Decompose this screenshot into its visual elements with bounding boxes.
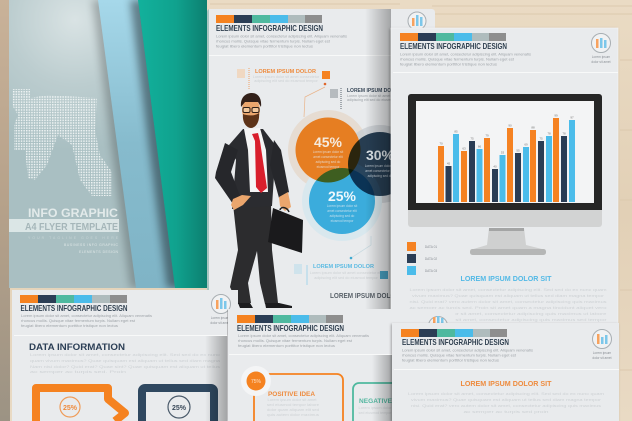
intro text: feugiat libero elementum porttitor tristique non lectus xyxy=(216,44,313,48)
venn circles: adipiscing sed do xyxy=(316,160,341,164)
color bar xyxy=(401,329,507,337)
icon: logo: Lorem ipsum xyxy=(211,316,230,320)
cover blue fold xyxy=(92,0,175,288)
chart paragraph: ac semper ac turpis sed. Proin sit amet quam a magna tincidunt aliquet vero xyxy=(410,306,606,310)
heading: ELEMENTS INFOGRAPHIC DESIGN xyxy=(400,42,507,51)
icon: logo: dolor sit amet xyxy=(592,356,612,360)
panel: lorem text flyer xyxy=(392,323,619,421)
bar value labels: 78 xyxy=(547,132,551,136)
positive idea box: POSITIVE IDEA xyxy=(268,391,315,398)
item: blue label: LOREM IPSUM DOLOR xyxy=(313,264,374,270)
venn circles: Lorem ipsum dolor sit xyxy=(313,150,343,154)
section paragraph xyxy=(30,353,221,374)
jacket torso xyxy=(229,129,276,209)
intro text: feugiat libero elementum porttitor tristique non lectus xyxy=(238,344,335,348)
chart paragraph xyxy=(410,288,608,322)
glasses xyxy=(243,108,259,112)
venn circles: adipiscing sed do xyxy=(368,174,393,178)
bar value labels xyxy=(439,114,574,168)
bar value labels: 53 xyxy=(501,150,504,154)
cover subtitle band xyxy=(9,219,119,233)
section title: DATA INFORMATION xyxy=(29,342,125,352)
color bar xyxy=(216,15,322,23)
monitor xyxy=(408,94,602,255)
color bar xyxy=(20,295,127,303)
bar value labels: 69 xyxy=(524,142,528,146)
legend: DATA 03 xyxy=(425,269,437,273)
intro text xyxy=(216,34,347,48)
item: orange label: Lorem ipsum dolor sit amet consectetur xyxy=(253,75,320,79)
section paragraph: vivum maximus? Quae quisquam est aliquam ut tellus sed diam magna tempor xyxy=(411,398,602,402)
item: orange label xyxy=(237,68,330,117)
chart paragraph: Lorem ipsum dolor sit amet, consectetur adipiscing elit. Sed sed do ex nunc quam xyxy=(410,288,606,292)
negative idea box: Lorem ipsum dolor xyxy=(358,406,392,410)
legend xyxy=(407,242,437,275)
icon: logo: Lorem ipsum xyxy=(593,351,612,355)
tie xyxy=(252,133,267,193)
intro text xyxy=(238,334,369,348)
item: blue label: adipiscing elit sed do eiusmod tempor xyxy=(314,276,378,280)
intro text xyxy=(21,314,152,328)
panel: flyer with monitor chart xyxy=(391,28,618,328)
item: gray label: LOREM IPSUM DOLOR xyxy=(347,88,402,94)
bar value labels: 75 xyxy=(470,136,474,140)
section paragraph xyxy=(408,392,604,414)
world map xyxy=(12,89,112,196)
intro text: feugiat libero elementum porttitor tristique non lectus xyxy=(400,62,497,66)
bar chart xyxy=(438,114,575,202)
hair xyxy=(241,93,261,107)
cover tagline: ELEMENTS DESIGN xyxy=(79,250,119,254)
heading: ELEMENTS INFOGRAPHIC DESIGN xyxy=(237,324,344,333)
item: blue label: Lorem ipsum dolor sit amet consectetur elit xyxy=(310,271,383,275)
beard xyxy=(243,113,259,128)
bar value labels: 99 xyxy=(554,114,558,118)
cover tagline xyxy=(28,236,119,254)
cover title: INFO GRAPHIC xyxy=(28,206,118,220)
positive idea box: 75% xyxy=(251,379,262,385)
cover tagline: BUSINESS INFO GRAPHIC xyxy=(64,243,119,247)
cover teal fold xyxy=(130,0,207,288)
circle value 45%: 45% xyxy=(314,134,343,150)
bar value labels: 45 xyxy=(447,162,450,166)
businessman xyxy=(215,93,303,308)
icon: logo: dolor sit amet xyxy=(591,60,611,64)
bar value labels: 85 xyxy=(454,130,458,134)
navy box: 25% xyxy=(172,405,187,412)
chart paragraph: vivum maximus? Quae quisquam est aliquam ut tellus sed diam magna tempor xyxy=(412,294,605,298)
circle value 30%: 30% xyxy=(366,147,395,163)
section paragraph: Nam nisi dolor? Quid erat? Quae sint? Quae quisquam est aliquam ut tellus xyxy=(30,365,220,369)
venn circles: eiusmod tempor xyxy=(331,219,354,223)
intro text: rhoncus mollis. Quisque vitae fermentum turpis. Nullam eget est xyxy=(402,354,516,358)
bar value labels: 75 xyxy=(539,136,543,140)
venn circles: Lorem ipsum dolor sit xyxy=(365,164,395,168)
panel: cover flyer xyxy=(9,0,207,288)
briefcase xyxy=(268,208,303,253)
stand xyxy=(470,228,546,255)
venn circles xyxy=(288,110,391,241)
shoes xyxy=(238,303,292,308)
intro text: rhoncus mollis. Quisque vitae fermentum turpis. Nullam eget est xyxy=(216,40,330,44)
section paragraph: Lorem ipsum dolor sit amet, consectetur adipiscing elit. Sed sed do ex nunc quam xyxy=(408,392,604,396)
section paragraph: Lorem ipsum dolor sit amet, consectetur adipiscing elit. Sed sed do ex nunc xyxy=(30,353,220,357)
chart paragraph: vero autem dolor sit amet, consectetur adipiscing quis maximus sed tempor xyxy=(410,318,608,322)
intro text xyxy=(402,348,533,362)
venn circles: adipiscing sed do xyxy=(330,214,355,218)
legs xyxy=(230,204,278,304)
positive idea box: quis autem dolor maximus xyxy=(267,413,319,417)
venn circles: amet consectetur elit xyxy=(365,169,395,173)
chart paragraph: Lorem ipsum dolor sit amet, consectetur adipiscing quis maximus ut labore xyxy=(410,312,606,316)
navy box xyxy=(142,388,214,421)
legend: DATA 01 xyxy=(425,245,437,249)
panel: positive idea flyer xyxy=(228,309,455,421)
negative idea box xyxy=(353,383,393,421)
section paragraph: quam vivum maximus? Quae quisquam est aliquam ut tellus sed diam magna xyxy=(30,359,221,363)
item: gray label: adipiscing elit sed do eiusmod tempor xyxy=(347,98,408,102)
intro text: rhoncus mollis. Quisque vitae fermentum turpis. Nullam eget est xyxy=(238,339,352,343)
face xyxy=(242,102,260,116)
intro text: Lorem ipsum dolor sit amet, consectetur adipiscing elit. Aliquam venenatis xyxy=(216,34,347,38)
item: gray label xyxy=(330,88,391,109)
shirt xyxy=(244,128,268,192)
left arm xyxy=(215,143,236,202)
intro text: Lorem ipsum dolor sit amet, consectetur adipiscing elit. Aliquam venenatis xyxy=(400,52,531,56)
intro text: feugiat libero elementum porttitor tristique non lectus xyxy=(21,324,118,328)
cover tagline: YOUR TAGLINE GOES HERE xyxy=(28,236,119,240)
positive idea box xyxy=(241,366,343,421)
bar value labels: 97 xyxy=(570,116,574,120)
negative idea box: sed eiusmod tempor xyxy=(358,411,392,415)
orange arrow box xyxy=(36,388,125,421)
intro text xyxy=(400,52,531,66)
legend: DATA 02 xyxy=(425,257,437,261)
venn circles: eiusmod tempor xyxy=(317,165,340,169)
chart paragraph: nisi. Quid erat? vero autem dolor sit amet, consectetur adipiscing quis maximus xyxy=(410,300,607,304)
bar value labels: 66 xyxy=(478,144,481,148)
bar value labels: 70 xyxy=(439,142,443,146)
section paragraph: nisi. Quid erat? vero autem dolor sit amet, consectetur adipiscing quis maximus xyxy=(411,404,601,408)
item: blue label xyxy=(294,236,388,285)
orange arrow box: 25% xyxy=(63,405,78,412)
color bar xyxy=(237,315,343,323)
icon: logo xyxy=(210,294,230,325)
right arm xyxy=(274,140,289,198)
bar value labels: 79 xyxy=(485,134,489,138)
cover gray layer xyxy=(9,0,175,288)
heading: ELEMENTS INFOGRAPHIC DESIGN xyxy=(402,338,509,347)
bar value labels: 78 xyxy=(562,132,566,136)
section paragraph: ac semper ac turpis sed proin xyxy=(464,410,548,414)
intro text: rhoncus mollis. Quisque vitae fermentum turpis. Nullam eget est xyxy=(21,319,135,323)
icon: logo xyxy=(591,34,611,64)
venn circles: amet consectetur elit xyxy=(327,209,357,213)
section heading: LOREM IPSUM DOLOR SIT xyxy=(460,381,552,388)
intro text: rhoncus mollis. Quisque vitae fermentum turpis. Nullam eget est xyxy=(400,58,514,62)
heading: ELEMENTS INFOGRAPHIC DESIGN xyxy=(20,304,128,313)
bar value labels: 90 xyxy=(508,124,512,128)
positive idea box: Lorem ipsum dolor sit amet xyxy=(268,398,318,402)
bar value labels: 63 xyxy=(462,146,466,150)
intro text: Lorem ipsum dolor sit amet, consectetur adipiscing elit. Aliquam venenatis xyxy=(402,348,533,352)
color bar xyxy=(400,33,506,41)
heading: ELEMENTS INFOGRAPHIC DESIGN xyxy=(216,24,323,33)
lower heading: LOREM IPSUM DOLOR xyxy=(330,293,400,300)
icon: logo: dolor sit amet xyxy=(210,321,230,325)
cover subtitle band: A4 FLYER TEMPLATE xyxy=(25,222,118,233)
icon: logo peek xyxy=(428,316,448,336)
bar value labels: 88 xyxy=(531,126,535,130)
icon: logo xyxy=(592,330,612,360)
icon: logo peek xyxy=(408,12,426,30)
section paragraph: ac semper ac turpis sed. Proin xyxy=(30,370,126,374)
intro text: feugiat libero elementum porttitor tristique non lectus xyxy=(402,358,499,362)
chart heading: LOREM IPSUM DOLOR SIT xyxy=(460,276,552,283)
panel: data information flyer xyxy=(12,290,238,421)
venn circles: Lorem ipsum dolor sit xyxy=(327,204,357,208)
positive idea box: dolor quam aliquam elit sed xyxy=(267,408,319,412)
item: orange label: adipiscing elit sed do eiusmod tempor xyxy=(254,79,318,83)
panel: flyer with businessman xyxy=(207,9,435,329)
intro text: Lorem ipsum dolor sit amet, consectetur adipiscing elit. Aliquam venenatis xyxy=(238,334,369,338)
bar value labels: 40 xyxy=(493,164,497,168)
item: gray label: Lorem ipsum dolor sit amet consectetur xyxy=(347,94,411,98)
item: orange label: LOREM IPSUM DOLOR xyxy=(255,69,316,75)
positive idea box: sed eiusmod tempor labore xyxy=(267,403,319,407)
hands xyxy=(231,192,291,211)
bar value labels: 55 xyxy=(516,148,520,152)
circle value 25%: 25% xyxy=(328,188,357,204)
icon: logo: Lorem ipsum xyxy=(592,55,611,59)
negative idea box: NEGATIVE xyxy=(359,398,393,405)
venn circles: amet consectetur elit xyxy=(313,155,343,159)
intro text: Lorem ipsum dolor sit amet, consectetur adipiscing elit. Aliquam venenatis xyxy=(21,314,152,318)
